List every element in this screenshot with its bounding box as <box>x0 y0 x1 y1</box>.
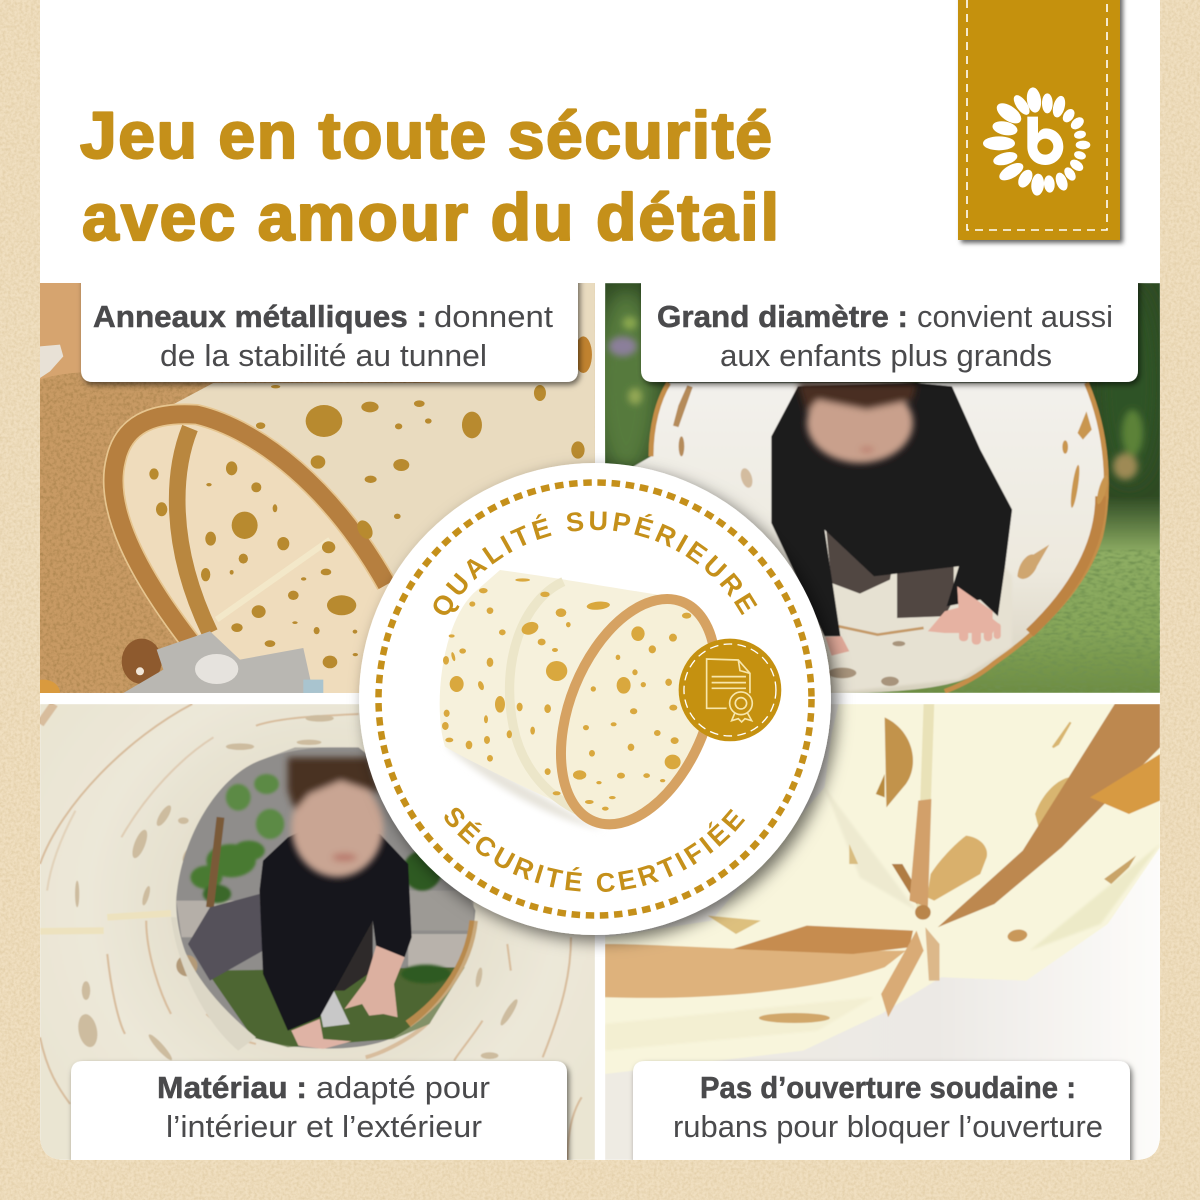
callout: material: adapté pour <box>316 1070 490 1105</box>
callout: no sudden opening: rubans pour bloquer l’ouverture <box>673 1109 1103 1144</box>
callout: large diameter: Grand diamètre : <box>657 299 908 334</box>
icon: sunflower logo <box>984 87 1090 195</box>
callout: material: l’intérieur et l’extérieur <box>166 1109 482 1144</box>
title <box>80 98 779 254</box>
callout: material: Matériau : <box>157 1070 307 1105</box>
photo: jute rug and tunnel ring <box>27 283 595 706</box>
title: avec amour du détail <box>82 180 779 254</box>
callout: metal rings: de la stabilité au tunnel <box>160 338 487 373</box>
panel: metal rings photo <box>27 270 595 706</box>
product: spotted tunnel <box>440 570 781 847</box>
callout: metal rings <box>81 270 578 382</box>
panel: material photo <box>40 704 595 1175</box>
callout: metal rings: Anneaux métalliques : <box>93 299 427 334</box>
callout: material <box>68 1060 574 1160</box>
callout: no sudden opening: Pas d’ouverture soudaine : <box>700 1070 1076 1105</box>
curved text: bottom: SÉCURITÉ CERTIFIÉE <box>444 808 746 892</box>
photo: view through tunnel <box>40 704 595 1160</box>
callout: large diameter: convient aussi <box>917 299 1113 334</box>
panel: large diameter photo <box>594 270 1161 693</box>
center badge <box>353 457 848 953</box>
callout: metal rings: donnent <box>434 299 553 334</box>
callout: no sudden opening <box>630 1060 1136 1160</box>
curved text: top: QUALITÉ SUPÉRIEURE <box>434 511 758 616</box>
photo: tied fabric ribbon <box>605 704 1160 1160</box>
callout: large diameter: aux enfants plus grands <box>720 338 1052 373</box>
icon: certificate seal <box>679 639 781 741</box>
panel: ribbon closure photo <box>605 704 1160 1175</box>
photo: child crawling out of tunnel <box>594 283 1161 693</box>
brand tag with logo <box>958 0 1120 240</box>
callout: large diameter <box>641 270 1138 382</box>
title: Jeu en toute sécurité <box>80 98 772 172</box>
